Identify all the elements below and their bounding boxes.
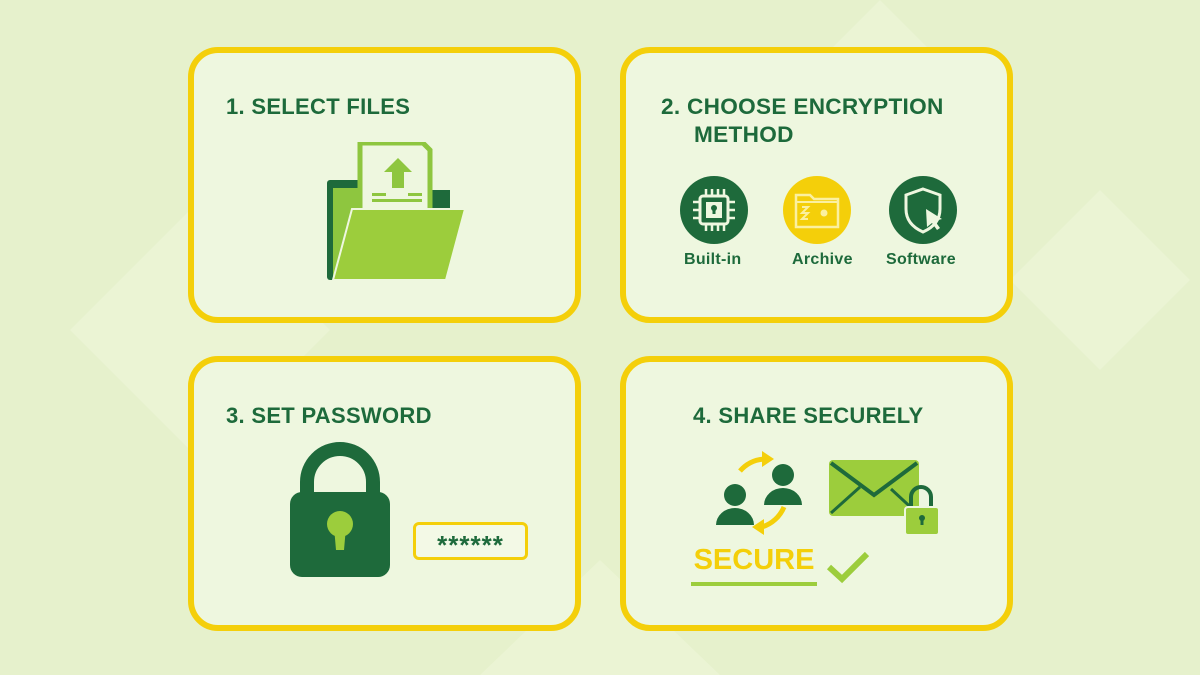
SECURE label: SECURE: [694, 544, 814, 576]
icon: built-in chip: [680, 176, 748, 244]
heading 3: 3. SET PASSWORD: [226, 403, 432, 428]
heading 2: 2. CHOOSE ENCRYPTION: [661, 94, 944, 119]
icon: envelope with lock: [829, 460, 938, 534]
panel: step 4: [620, 356, 1013, 631]
label software: Software: [886, 251, 956, 268]
heading 4: 4. SHARE SECURELY: [693, 403, 923, 428]
panel: step 2: [620, 47, 1013, 323]
icon: padlock: [290, 442, 390, 577]
icon: users exchange: [716, 451, 802, 535]
panel: step 3: [188, 356, 581, 631]
heading 2: METHOD: [694, 122, 794, 147]
panel: step 1: [188, 47, 581, 323]
password field: [413, 522, 528, 560]
icon: archive: [783, 176, 851, 244]
icon: check: [827, 552, 869, 584]
icon: software shield: [889, 176, 957, 244]
icon: folder with upload: [327, 142, 464, 280]
password field: ******: [437, 530, 504, 560]
heading 2: [661, 94, 944, 147]
label archive: Archive: [792, 251, 853, 268]
heading 1: 1. SELECT FILES: [226, 94, 410, 119]
label built-in: Built-in: [684, 251, 742, 268]
